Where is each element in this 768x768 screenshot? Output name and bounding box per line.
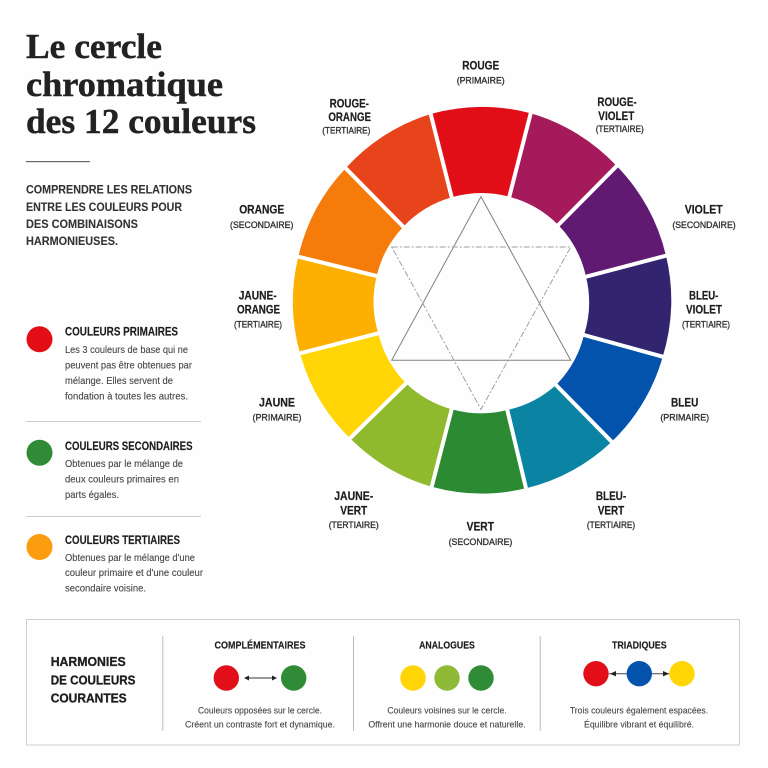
label: bleu-violet: VIOLET [686, 305, 722, 317]
label: bleu-vert: BLEU- [596, 491, 626, 503]
label: jaune-orange: (TERTIAIRE) [234, 319, 282, 330]
label: jaune: JAUNE [259, 398, 295, 410]
label: bleu-vert: (TERTIAIRE) [587, 520, 635, 531]
title: chromatique [26, 65, 223, 104]
harmony: analogues: Couleurs voisines sur le cercle. [387, 705, 507, 716]
legend: primary colours: fondation à toutes les autres. [65, 390, 188, 402]
label: jaune-vert [329, 491, 379, 531]
harmony: analogues: ANALOGUES [419, 641, 475, 652]
subtitle: DES COMBINAISONS [26, 217, 138, 231]
title [26, 27, 256, 141]
label: rouge-violet [596, 97, 644, 135]
legend: tertiary colours: couleur primaire et d'une couleur [65, 567, 203, 579]
harmony: complémentaires [185, 639, 335, 731]
label: bleu-vert [587, 491, 635, 531]
panel: harmonies [26, 620, 740, 745]
label: rouge: (PRIMAIRE) [457, 75, 505, 86]
legend: primary colours: mélange. Elles servent de [65, 375, 173, 387]
label: vert [449, 522, 512, 548]
label: orange [230, 204, 293, 231]
colour wheel [293, 107, 671, 493]
title: des 12 couleurs [26, 102, 256, 141]
legend: primary colours [26, 326, 192, 402]
panel heading: DE COULEURS [51, 672, 136, 688]
label: bleu: BLEU [671, 398, 698, 410]
label: rouge: ROUGE [462, 60, 499, 72]
label: rouge-orange: ORANGE [328, 112, 371, 124]
harmony: complémentaires: COMPLÉMENTAIRES [214, 639, 306, 652]
label: rouge-violet: ROUGE- [597, 97, 637, 109]
label: bleu [660, 398, 709, 424]
legend: primary colours: COULEURS PRIMAIRES [65, 326, 178, 338]
legend: secondary colours [26, 440, 193, 501]
subtitle: COMPRENDRE LES RELATIONS [26, 182, 192, 196]
segment: jaune [300, 333, 406, 438]
segment: bleu-violet [584, 256, 671, 357]
title: Le cercle [26, 27, 162, 66]
segment: violet [558, 166, 666, 277]
label: vert: (SECONDAIRE) [449, 537, 512, 548]
panel heading: COURANTES [51, 690, 127, 706]
label: jaune-orange [234, 290, 282, 330]
label: jaune-orange: ORANGE [237, 305, 280, 317]
label: rouge [457, 60, 505, 86]
label: bleu-violet: BLEU- [689, 290, 718, 302]
legend: secondary colours: parts égales. [65, 489, 119, 501]
harmony: complémentaires: Couleurs opposées sur le cercle. [198, 705, 322, 716]
label: jaune [252, 398, 302, 424]
harmony: triadiques: TRIADIQUES [612, 641, 667, 652]
subtitle [26, 182, 192, 248]
label: bleu-vert: VERT [598, 505, 624, 517]
harmony: triadiques: Équilibre vibrant et équilibré. [584, 720, 694, 731]
segment: rouge-violet [509, 113, 617, 225]
label: violet [672, 204, 736, 231]
label: rouge-orange: (TERTIAIRE) [322, 126, 370, 136]
segment: bleu [556, 335, 663, 442]
label: rouge-violet: VIOLET [598, 111, 634, 123]
label: violet: VIOLET [685, 204, 723, 216]
arrows: triad connectors [609, 671, 670, 676]
subtitle: HARMONIEUSES. [26, 234, 118, 248]
label: jaune-vert: VERT [340, 505, 367, 517]
legend: tertiary colours [26, 534, 203, 595]
legend: secondary colours: Obtenues par le mélange de [65, 458, 183, 470]
harmony: triadiques [570, 641, 708, 731]
legend: secondary colours: COULEURS SECONDAIRES [65, 441, 193, 453]
segment: vert [432, 409, 526, 493]
label: jaune: (PRIMAIRE) [252, 413, 302, 424]
legend: tertiary colours: COULEURS TERTIAIRES [65, 535, 180, 547]
legend: tertiary colours: Obtenues par le mélange d'une [65, 552, 195, 564]
label: jaune-orange: JAUNE- [239, 290, 277, 302]
harmony: complémentaires: Créent un contraste fort et dynamique. [185, 720, 335, 731]
subtitle: ENTRE LES COULEURS POUR [26, 200, 182, 214]
label: violet: (SECONDAIRE) [672, 220, 736, 231]
segment: rouge-orange [346, 114, 452, 227]
legend: primary colours: Les 3 couleurs de base qui ne [65, 344, 188, 356]
label: rouge-violet: (TERTIAIRE) [596, 124, 644, 135]
panel heading [51, 654, 136, 706]
harmony: analogues: Offrent une harmonie douce et naturelle. [368, 720, 526, 731]
legend: secondary colours: deux couleurs primaires en [65, 474, 179, 486]
label: jaune-vert: JAUNE- [334, 491, 373, 503]
legend: primary colours: peuvent pas être obtenues par [65, 360, 192, 372]
segment: jaune-orange [293, 257, 378, 353]
segment: orange [298, 168, 403, 276]
harmony: triadiques: Trois couleurs également espacées. [570, 705, 708, 716]
solid triangle [392, 197, 571, 360]
segment: bleu-vert [507, 385, 612, 488]
label: orange: ORANGE [239, 204, 284, 216]
harmony: analogues [368, 641, 526, 731]
arrow: double-headed [244, 676, 277, 680]
label: bleu-violet: (TERTIAIRE) [682, 319, 730, 330]
label: rouge-orange [322, 98, 371, 136]
segment: rouge [431, 107, 531, 197]
label: orange: (SECONDAIRE) [230, 220, 293, 231]
label: bleu: (PRIMAIRE) [660, 413, 709, 424]
label: rouge-orange: ROUGE- [330, 98, 369, 110]
label: bleu-violet [682, 290, 730, 330]
label: jaune-vert: (TERTIAIRE) [329, 520, 379, 531]
segment: jaune-vert [350, 383, 452, 487]
panel heading: HARMONIES [51, 654, 126, 669]
label: vert: VERT [467, 522, 494, 534]
dashed triangle [392, 247, 571, 409]
legend: tertiary colours: secondaire voisine. [65, 583, 146, 595]
